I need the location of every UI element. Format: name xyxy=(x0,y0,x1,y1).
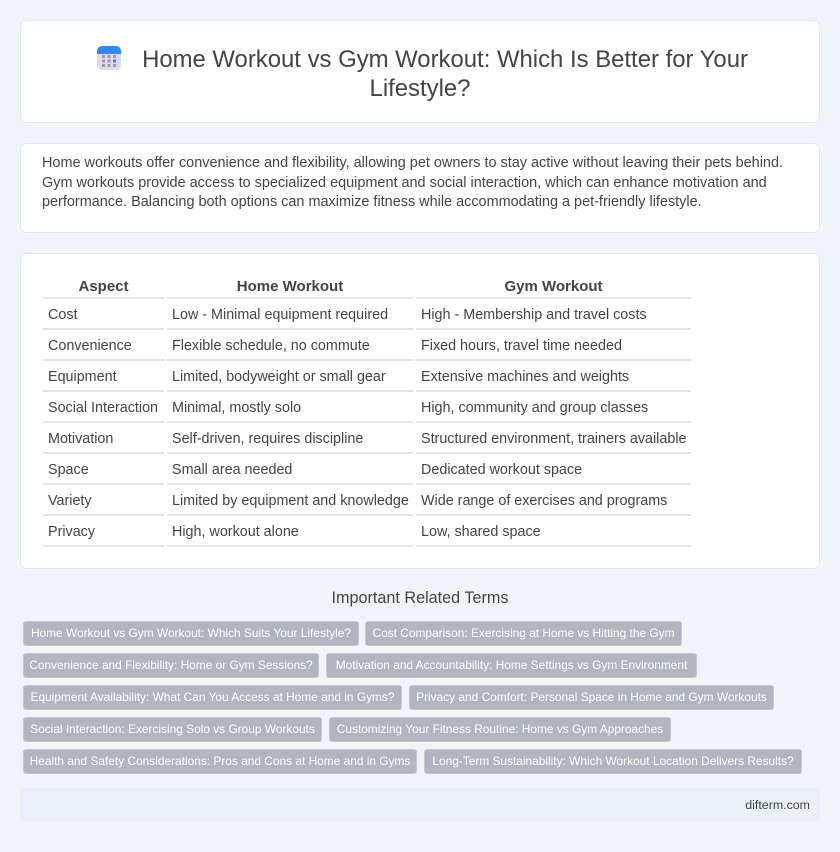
table row: cost: High - Membership and travel costs xyxy=(421,307,647,323)
table header: Home Workout xyxy=(237,278,343,295)
related terms heading: Important Related Terms xyxy=(332,589,508,607)
table row: social interaction: Minimal, mostly solo xyxy=(172,400,301,416)
intro panel xyxy=(20,143,820,233)
table row: equipment: Equipment xyxy=(48,369,117,385)
tag xyxy=(365,621,682,646)
table row: convenience: Fixed hours, travel time needed xyxy=(421,338,622,354)
table header: Aspect xyxy=(78,278,129,295)
tag xyxy=(23,749,417,774)
tag: Customizing Your Fitness Routine: Home vs Gym Approaches xyxy=(337,722,663,736)
tag xyxy=(326,653,697,678)
icon: calendar xyxy=(97,46,121,70)
tag xyxy=(23,621,359,646)
title: Lifestyle? xyxy=(370,75,470,102)
tag xyxy=(409,685,774,710)
table row: motivation: Self-driven, requires discipline xyxy=(172,431,363,447)
tag: Motivation and Accountability: Home Settings vs Gym Environment xyxy=(336,658,687,672)
table row: privacy xyxy=(43,524,691,547)
table row: privacy: High, workout alone xyxy=(172,524,299,540)
tag: Equipment Availability: What Can You Access at Home and in Gyms? xyxy=(31,690,394,704)
table row: variety: Variety xyxy=(48,493,92,509)
tag xyxy=(23,653,319,678)
table row: cost: Low - Minimal equipment required xyxy=(172,307,388,323)
table row: variety xyxy=(43,493,691,516)
title xyxy=(142,46,748,102)
table row: equipment xyxy=(43,369,691,392)
table row: motivation: Motivation xyxy=(48,431,113,447)
intro text xyxy=(42,155,783,210)
tag: Health and Safety Considerations: Pros and Cons at Home and in Gyms xyxy=(30,754,410,768)
table row: convenience: Flexible schedule, no commute xyxy=(172,338,370,354)
footer brand: difterm.com xyxy=(745,798,810,812)
table row: social interaction: Social Interaction xyxy=(48,400,158,416)
intro text: performance. Balancing both options can maximize fitness while accommodating a pet-friendly lifestyle. xyxy=(42,194,702,210)
table row: equipment: Limited, bodyweight or small gear xyxy=(172,369,386,385)
table row: social interaction: High, community and group classes xyxy=(421,400,648,416)
table row: space xyxy=(43,462,691,485)
tag: Long-Term Sustainability: Which Workout Location Delivers Results? xyxy=(432,754,794,768)
table row: variety: Limited by equipment and knowledge xyxy=(172,493,409,509)
title: Home Workout vs Gym Workout: Which Is Better for Your xyxy=(142,46,748,73)
footer bar xyxy=(20,788,820,822)
table row: social interaction xyxy=(43,400,691,423)
table row: space: Small area needed xyxy=(172,462,292,478)
table row: motivation xyxy=(43,431,691,454)
table row: convenience: Convenience xyxy=(48,338,132,354)
tag xyxy=(424,749,802,774)
tag xyxy=(23,717,322,742)
table header: Gym Workout xyxy=(504,278,603,295)
table row: space: Dedicated workout space xyxy=(421,462,582,478)
header card xyxy=(20,20,820,123)
intro text: Home workouts offer convenience and flexibility, allowing pet owners to stay active without leaving their pets behind. xyxy=(42,155,783,171)
tag: Cost Comparison: Exercising at Home vs Hitting the Gym xyxy=(372,626,674,640)
tag xyxy=(329,717,671,742)
tag: Privacy and Comfort: Personal Space in Home and Gym Workouts xyxy=(416,690,767,704)
table row: motivation: Structured environment, trainers available xyxy=(421,431,686,447)
intro text: Gym workouts provide access to specialized equipment and social interaction, which can enhance motivation and xyxy=(42,174,767,190)
table row: cost xyxy=(43,307,691,330)
tag: Social Interaction: Exercising Solo vs Group Workouts xyxy=(30,722,315,736)
tag: Home Workout vs Gym Workout: Which Suits Your Lifestyle? xyxy=(31,626,351,640)
tag xyxy=(23,685,402,710)
table row: privacy: Low, shared space xyxy=(421,524,541,540)
table row: equipment: Extensive machines and weights xyxy=(421,369,629,385)
table header xyxy=(43,278,691,299)
table row: variety: Wide range of exercises and programs xyxy=(421,493,667,509)
table row: convenience xyxy=(43,338,691,361)
related terms tags xyxy=(23,621,802,774)
table row: space: Space xyxy=(48,462,89,478)
table row: privacy: Privacy xyxy=(48,524,95,540)
table row: cost: Cost xyxy=(48,307,78,323)
comparison table panel xyxy=(20,253,820,569)
tag: Convenience and Flexibility: Home or Gym Sessions? xyxy=(29,658,313,672)
